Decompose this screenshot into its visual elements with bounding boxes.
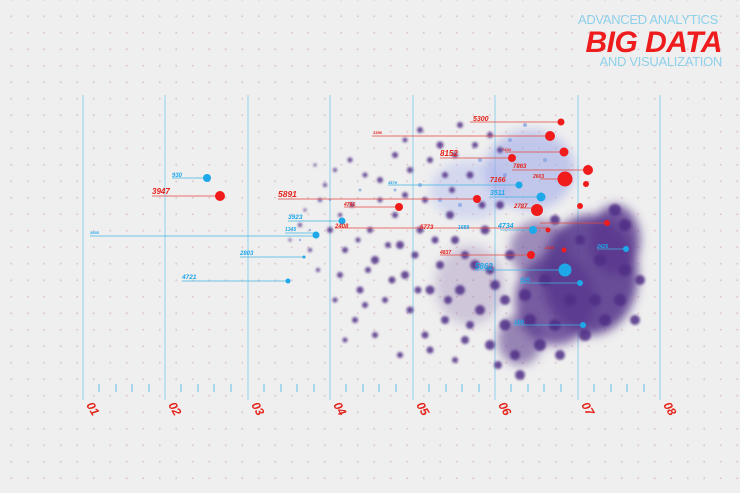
purple glow mass [430, 130, 640, 365]
red labels: 7863 [513, 164, 527, 170]
red labels: 2787 [513, 204, 528, 210]
axis labels: 02 [165, 400, 184, 418]
subtitle: advanced analytics: ADVANCED ANALYTICS [578, 12, 718, 27]
red labels: 8152 [440, 149, 458, 158]
red annotation lines [152, 122, 607, 255]
blue labels: 930 [172, 173, 183, 179]
axis labels [83, 400, 679, 419]
purple dots [288, 122, 645, 380]
title block [578, 12, 722, 69]
red labels [152, 116, 555, 256]
axis labels: 06 [495, 400, 514, 418]
blue labels: 925 [520, 278, 531, 284]
blue labels: 5862 [475, 262, 493, 271]
red labels: 5891 [278, 189, 297, 199]
red labels: 1356 [373, 130, 383, 135]
blue labels: 3923 [288, 214, 303, 221]
axis grid lines [83, 95, 660, 400]
blue labels [90, 173, 608, 326]
red labels: 2603 [532, 174, 544, 180]
blue labels: 4479 [387, 180, 398, 185]
blue labels: 3511 [490, 190, 505, 197]
blue labels: 166 [514, 320, 525, 326]
axis labels: 05 [413, 400, 432, 418]
blue labels: 4721 [181, 274, 197, 281]
axis labels: 08 [660, 400, 679, 418]
red labels: 5773 [420, 225, 434, 231]
blue annotation lines [90, 178, 626, 325]
axis labels: 01 [83, 400, 102, 418]
blue labels: 3935 [90, 230, 100, 235]
red labels: 4837 [439, 250, 451, 256]
blue labels: 1689 [458, 225, 469, 231]
red labels: 3947 [152, 187, 170, 196]
blue data points [203, 174, 629, 328]
red labels: 5300 [473, 116, 489, 123]
red labels: 7166 [490, 177, 506, 184]
blue labels: 2425 [596, 244, 608, 250]
small light blue dots [299, 123, 547, 241]
title: big data: BIG DATA [585, 26, 722, 59]
red labels: 4791 [343, 202, 355, 208]
subtitle: and visualization: AND VISUALIZATION [599, 54, 722, 69]
axis labels: 07 [578, 400, 598, 419]
blue labels: 1345 [285, 227, 296, 233]
red data points [215, 118, 610, 259]
axis labels: 03 [248, 400, 267, 418]
blue labels: 4734 [497, 223, 514, 230]
axis labels: 04 [330, 400, 349, 418]
blue labels: 2803 [239, 251, 254, 257]
axis ticks [99, 384, 644, 392]
red labels: 2408 [334, 224, 349, 230]
red labels: 2108 [544, 245, 555, 250]
red labels: 7434 [502, 147, 512, 152]
